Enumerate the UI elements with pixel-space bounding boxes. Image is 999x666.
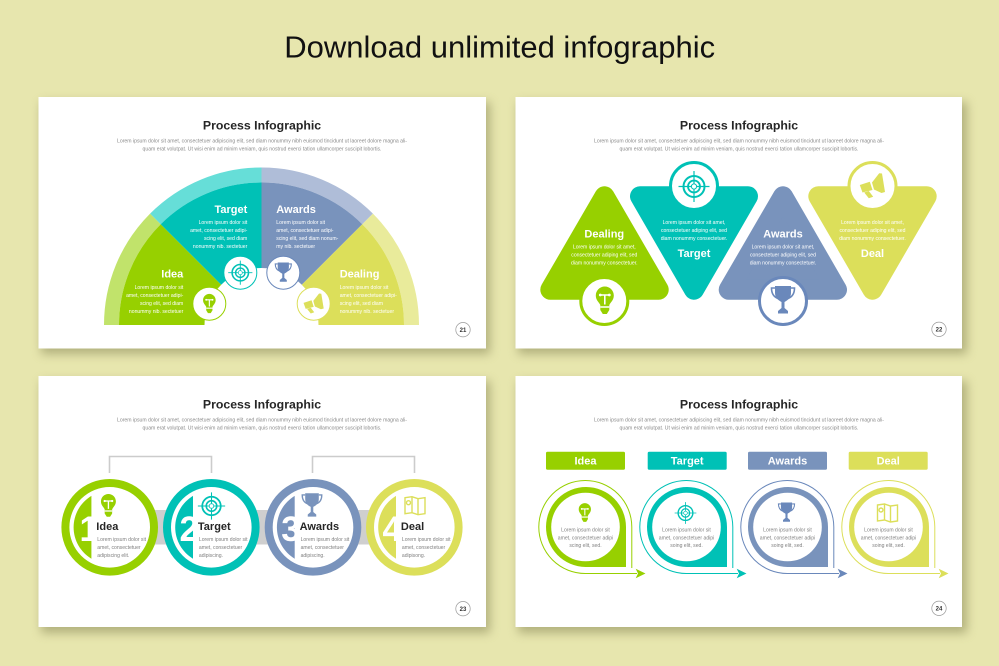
bracket left xyxy=(110,456,212,473)
pin: Target: soing elit, sed. xyxy=(670,543,703,549)
triangle: Target: Lorem ipsum dolor sit amet, xyxy=(663,220,725,226)
slide 24 intro text: quam erat volutpat. Ut wisi enim ad minim veniam, quis nostrud exerci tation ullamcorper suscipit lobortis. xyxy=(620,425,858,431)
panel: slide 23 numbered circles xyxy=(38,376,490,633)
label: Idea: Idea xyxy=(574,456,597,468)
triangle: Target: diam nonummy consectetuer. xyxy=(661,236,727,242)
step 4: Deal: Deal xyxy=(401,521,424,533)
page heading: Download unlimited infographic xyxy=(284,30,715,64)
segment text: Idea xyxy=(126,268,184,315)
page number 24: 24 xyxy=(936,606,943,612)
pin: Idea: amet, consectetuer adipi xyxy=(558,535,613,541)
pin: Awards xyxy=(741,480,848,578)
slide 22 intro text: Lorem ipsum dolor sit amet, consectetuer adipiscing elit, sed diam nonummy nibh euismod tincidunt ut laoreet dolore magna ali- xyxy=(594,138,884,144)
triangle: Deal xyxy=(818,162,927,290)
segment text: Dealing xyxy=(340,268,397,315)
step 3: Awards: adipiscing. xyxy=(301,553,325,559)
pin: Target xyxy=(640,480,746,578)
triangle: Dealing: diam nonummy consectetuer. xyxy=(571,261,638,267)
step 3: Awards: Awards xyxy=(300,521,339,533)
step 3: Awards: amet, consectetuer xyxy=(301,545,344,551)
slide 24 intro text xyxy=(594,417,884,431)
step 2: Target: Target xyxy=(198,521,231,533)
pin: Target: amet, consectetuer adipi xyxy=(659,535,714,541)
segment text: Dealing: amet, consectetuer adipi- xyxy=(340,293,397,299)
step 1: Idea: Lorem ipsum dolor sit xyxy=(97,537,147,543)
segment text: Awards: amet, consectetuer adipi- xyxy=(276,228,334,234)
segment text: Dealing: Dealing xyxy=(340,268,379,280)
triangle: Dealing xyxy=(550,196,659,324)
step 3: Awards xyxy=(269,483,357,572)
segment text: Target xyxy=(190,204,248,250)
step 2: Target: amet, consectetuer xyxy=(199,545,243,551)
step 2: Target xyxy=(167,483,256,572)
triangle: Awards: diam nonummy consectetuer. xyxy=(750,261,816,267)
label: Awards: Awards xyxy=(768,456,807,468)
step 4: Deal: Lorem ipsum dolor sit xyxy=(402,537,451,543)
segment text: Dealing: scing elit, sed diam xyxy=(340,301,383,307)
slide 24 title: Process Infographic xyxy=(680,398,798,412)
step 3: Awards: 3 xyxy=(281,510,301,549)
segment text: Idea: Lorem ipsum dolor sit xyxy=(135,285,184,291)
page number 21: 21 xyxy=(460,328,467,334)
step 4: Deal xyxy=(370,483,459,572)
slide 22 title: Process Infographic xyxy=(680,118,798,132)
label: Deal xyxy=(849,452,928,470)
segment text: Idea: scing elit, sed diam xyxy=(140,301,183,307)
page number 22 xyxy=(932,322,946,336)
segment text: Awards: Awards xyxy=(276,204,316,216)
icon: megaphone badge xyxy=(297,287,330,320)
pin: Awards: Lorem ipsum dolor sit xyxy=(763,528,812,534)
pin: Deal: Lorem ipsum dolor sit xyxy=(864,528,913,534)
panel: slide 21 semicircle xyxy=(38,97,490,354)
slide 24 intro text: Lorem ipsum dolor sit amet, consectetuer adipiscing elit, sed diam nonummy nibh euismod tincidunt ut laoreet dolore magna ali- xyxy=(594,417,884,423)
slide 21 intro text: quam erat volutpat. Ut wisi enim ad minim veniam, quis nostrud exerci tation ullamcorper suscipit lobortis. xyxy=(143,146,381,152)
slide 23 title: Process Infographic xyxy=(203,398,321,412)
triangle: Target: Target xyxy=(678,248,711,260)
segment text: Awards: my nib. sectetuer xyxy=(276,244,315,250)
triangle: Target: consectetuer adiping elit, sed xyxy=(661,228,727,234)
label: Target xyxy=(648,452,727,470)
segment text: Target: Target xyxy=(214,204,248,216)
slide 22 intro text xyxy=(594,138,884,152)
step 1: Idea: adipiscing elit. xyxy=(97,553,129,559)
triangle: Deal: Deal xyxy=(861,248,884,260)
step 4: Deal: 4 xyxy=(382,510,402,549)
triangle: Deal: consectetuer adiping elit, sed xyxy=(840,228,906,234)
pin: Idea: Lorem ipsum dolor sit xyxy=(561,528,610,534)
segment text: Awards: Lorem ipsum dolor sit xyxy=(276,220,326,226)
triangle: Dealing: consectetuer adiping elit, sed xyxy=(571,253,637,259)
segment text: Awards: scing elit, sed diam nonum- xyxy=(276,236,339,242)
slide 21 title: Process Infographic xyxy=(203,118,321,132)
connector bar xyxy=(150,510,375,544)
step 2: Target: Lorem ipsum dolor sit xyxy=(199,537,248,543)
slide 23 intro text: quam erat volutpat. Ut wisi enim ad minim veniam, quis nostrud exerci tation ullamcorper suscipit lobortis. xyxy=(143,425,381,431)
label: Target: Target xyxy=(671,456,704,468)
segment text: Target: scing elit, sed diam xyxy=(204,236,247,242)
step 3: Awards: Lorem ipsum dolor sit xyxy=(301,537,350,543)
pin: Target: Lorem ipsum dolor sit xyxy=(662,528,711,534)
slide 23 intro text xyxy=(117,417,407,431)
panel: slide 22 triangles xyxy=(516,97,967,354)
label: Idea xyxy=(546,452,625,470)
segment text: Dealing: Lorem ipsum dolor sit xyxy=(340,285,389,291)
bracket right xyxy=(312,456,414,473)
step 2: Target: 2 xyxy=(180,510,199,549)
step 4: Deal: amet, consectetuer xyxy=(402,545,446,551)
icon: bulb badge xyxy=(193,287,226,320)
icon: target badge xyxy=(224,256,257,289)
triangle: Deal: Lorem ipsum dolor sit amet, xyxy=(841,220,904,226)
segment text: Idea: Idea xyxy=(161,268,184,280)
segment text: Dealing: nonummy nib. sectetuer xyxy=(340,309,394,315)
triangle: Awards: Awards xyxy=(763,229,803,241)
slide 21 intro text: Lorem ipsum dolor sit amet, consectetuer adipiscing elit, sed diam nonummy nibh euismod tincidunt ut laoreet dolore magna ali- xyxy=(117,138,407,144)
page number 23: 23 xyxy=(460,607,467,613)
segment text: Idea: amet, consectetuer adipi- xyxy=(126,293,184,299)
slide 22 intro text: quam erat volutpat. Ut wisi enim ad minim veniam, quis nostrud exerci tation ullamcorper suscipit lobortis. xyxy=(620,146,858,152)
pin: Idea xyxy=(539,480,646,578)
triangle: Awards xyxy=(729,196,837,324)
triangle: Awards: Lorem ipsum dolor sit amet, xyxy=(752,245,814,251)
icon: trophy badge xyxy=(267,256,300,289)
step 1: Idea: Idea xyxy=(96,521,119,533)
pin: Idea: scing elit, sed. xyxy=(569,543,602,549)
pin: Awards: amet, consectetuer adipi xyxy=(760,535,815,541)
triangle: Awards: consectetuer adiping elit, sed xyxy=(750,253,816,259)
page number 22: 22 xyxy=(936,327,943,333)
triangle: Deal: diam nonummy consectetuer. xyxy=(839,236,906,242)
slide 23 intro text: Lorem ipsum dolor sit amet, consectetuer adipiscing elit, sed diam nonummy nibh euismod tincidunt ut laoreet dolore magna ali- xyxy=(117,417,407,423)
page number 23 xyxy=(456,602,470,616)
semicircle chart xyxy=(104,167,419,325)
segment text: Awards xyxy=(276,204,339,250)
slide 21 intro text xyxy=(117,138,407,152)
triangle: Dealing: Lorem ipsum dolor sit amet, xyxy=(573,245,636,251)
triangle: Dealing: Dealing xyxy=(584,229,624,241)
page number 24 xyxy=(932,601,946,616)
pin: Deal: amet, consectetuer adipi xyxy=(861,535,916,541)
segment text: Target: nonummy nib. sectetuer xyxy=(193,244,248,250)
pin: Deal: soing elit, sed. xyxy=(872,543,905,549)
page number 21 xyxy=(456,322,470,337)
pin: Awards: soing elit, sed. xyxy=(771,543,804,549)
step 4: Deal: adipisong. xyxy=(402,553,425,559)
step 1: Idea: amet, consectetuer xyxy=(97,545,141,551)
step 2: Target: adipiscing. xyxy=(199,553,223,559)
step 1: Idea: 1 xyxy=(80,510,99,549)
panel: slide 24 pins xyxy=(516,376,967,633)
step 1: Idea xyxy=(65,483,154,572)
segment text: Idea: nonummy nib. sectetuer xyxy=(129,309,184,315)
segment text: Target: amet, consectetuer adipi- xyxy=(190,228,248,234)
triangle: Target xyxy=(640,162,748,290)
segment text: Target: Lorem ipsum dolor sit xyxy=(199,220,248,226)
label: Deal: Deal xyxy=(877,456,900,468)
label: Awards xyxy=(748,452,827,470)
pin: Deal xyxy=(842,480,948,578)
